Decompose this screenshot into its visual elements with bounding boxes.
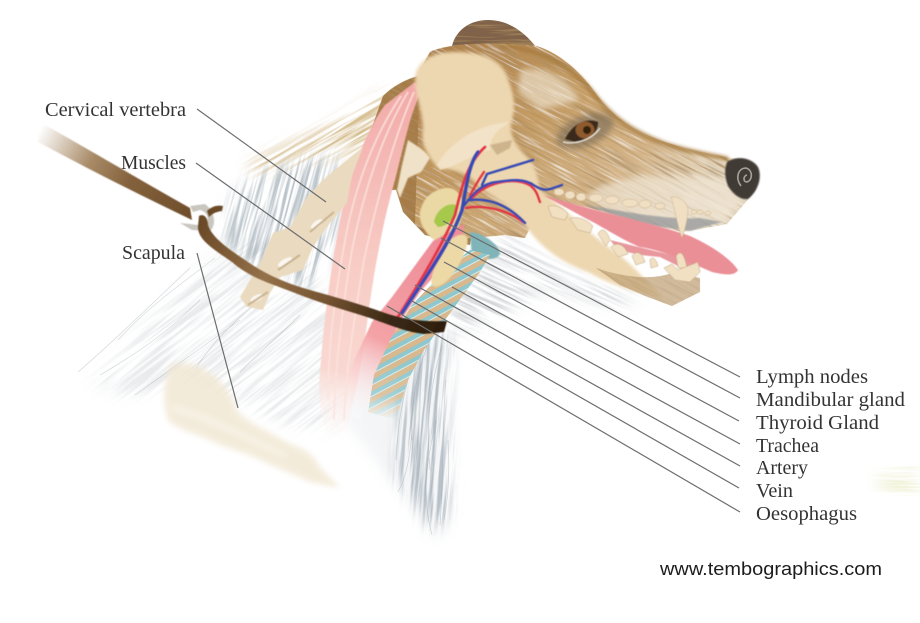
atlas bone [397, 140, 430, 198]
label: Trachea: Trachea [756, 436, 819, 457]
metal ring [180, 204, 214, 231]
vein [402, 152, 562, 313]
chest fur [345, 327, 469, 540]
lymph node [434, 204, 456, 227]
leash [38, 125, 192, 220]
icon: nose [725, 158, 760, 199]
thyroid gland [431, 235, 468, 287]
forehead golden edge [500, 46, 728, 159]
upper lip grey fur [585, 205, 722, 231]
mandibular gland [420, 188, 463, 243]
back grey fur [188, 124, 379, 321]
trachea [368, 250, 490, 420]
scapula [164, 363, 340, 488]
label: Muscles: Muscles [121, 153, 186, 174]
leader lines [196, 109, 740, 512]
label: Lymph nodes: Lymph nodes [756, 367, 868, 388]
teal larynx [470, 232, 500, 259]
forehead highlight [518, 69, 580, 110]
label: Scapula: Scapula [122, 243, 185, 264]
label: Vein: Vein [756, 481, 793, 502]
head coat [334, 0, 837, 381]
oesophagus [345, 224, 464, 420]
website credit: www.tembographics.com [659, 558, 882, 579]
ear [452, 20, 536, 47]
upper teeth [554, 188, 711, 238]
label: Cervical vertebra: Cervical vertebra [45, 100, 186, 121]
vertebra holes [249, 218, 324, 304]
body fur [0, 25, 437, 554]
icon: tongue [543, 195, 738, 274]
muzzle light fur [585, 176, 745, 229]
under-jaw and throat fur [412, 162, 678, 408]
lower teeth [548, 206, 700, 282]
canine [671, 197, 688, 238]
label: Oesophagus: Oesophagus [756, 504, 857, 525]
dog illustration [78, 20, 761, 536]
chin fur [580, 225, 716, 349]
muscles [319, 82, 423, 445]
head fur [334, 0, 837, 381]
label: Artery: Artery [756, 458, 808, 479]
icon: eye [563, 121, 600, 143]
skull [415, 52, 664, 298]
collar [198, 206, 447, 334]
label: Mandibular gland: Mandibular gland [756, 390, 905, 411]
artery [396, 147, 540, 320]
cervical vertebrae [240, 147, 363, 310]
neck fur [285, 26, 545, 295]
eye shadow [552, 106, 618, 156]
label: Thyroid Gland: Thyroid Gland [756, 413, 879, 434]
blood vessels [396, 147, 562, 320]
faint grass at right edge [872, 468, 920, 492]
